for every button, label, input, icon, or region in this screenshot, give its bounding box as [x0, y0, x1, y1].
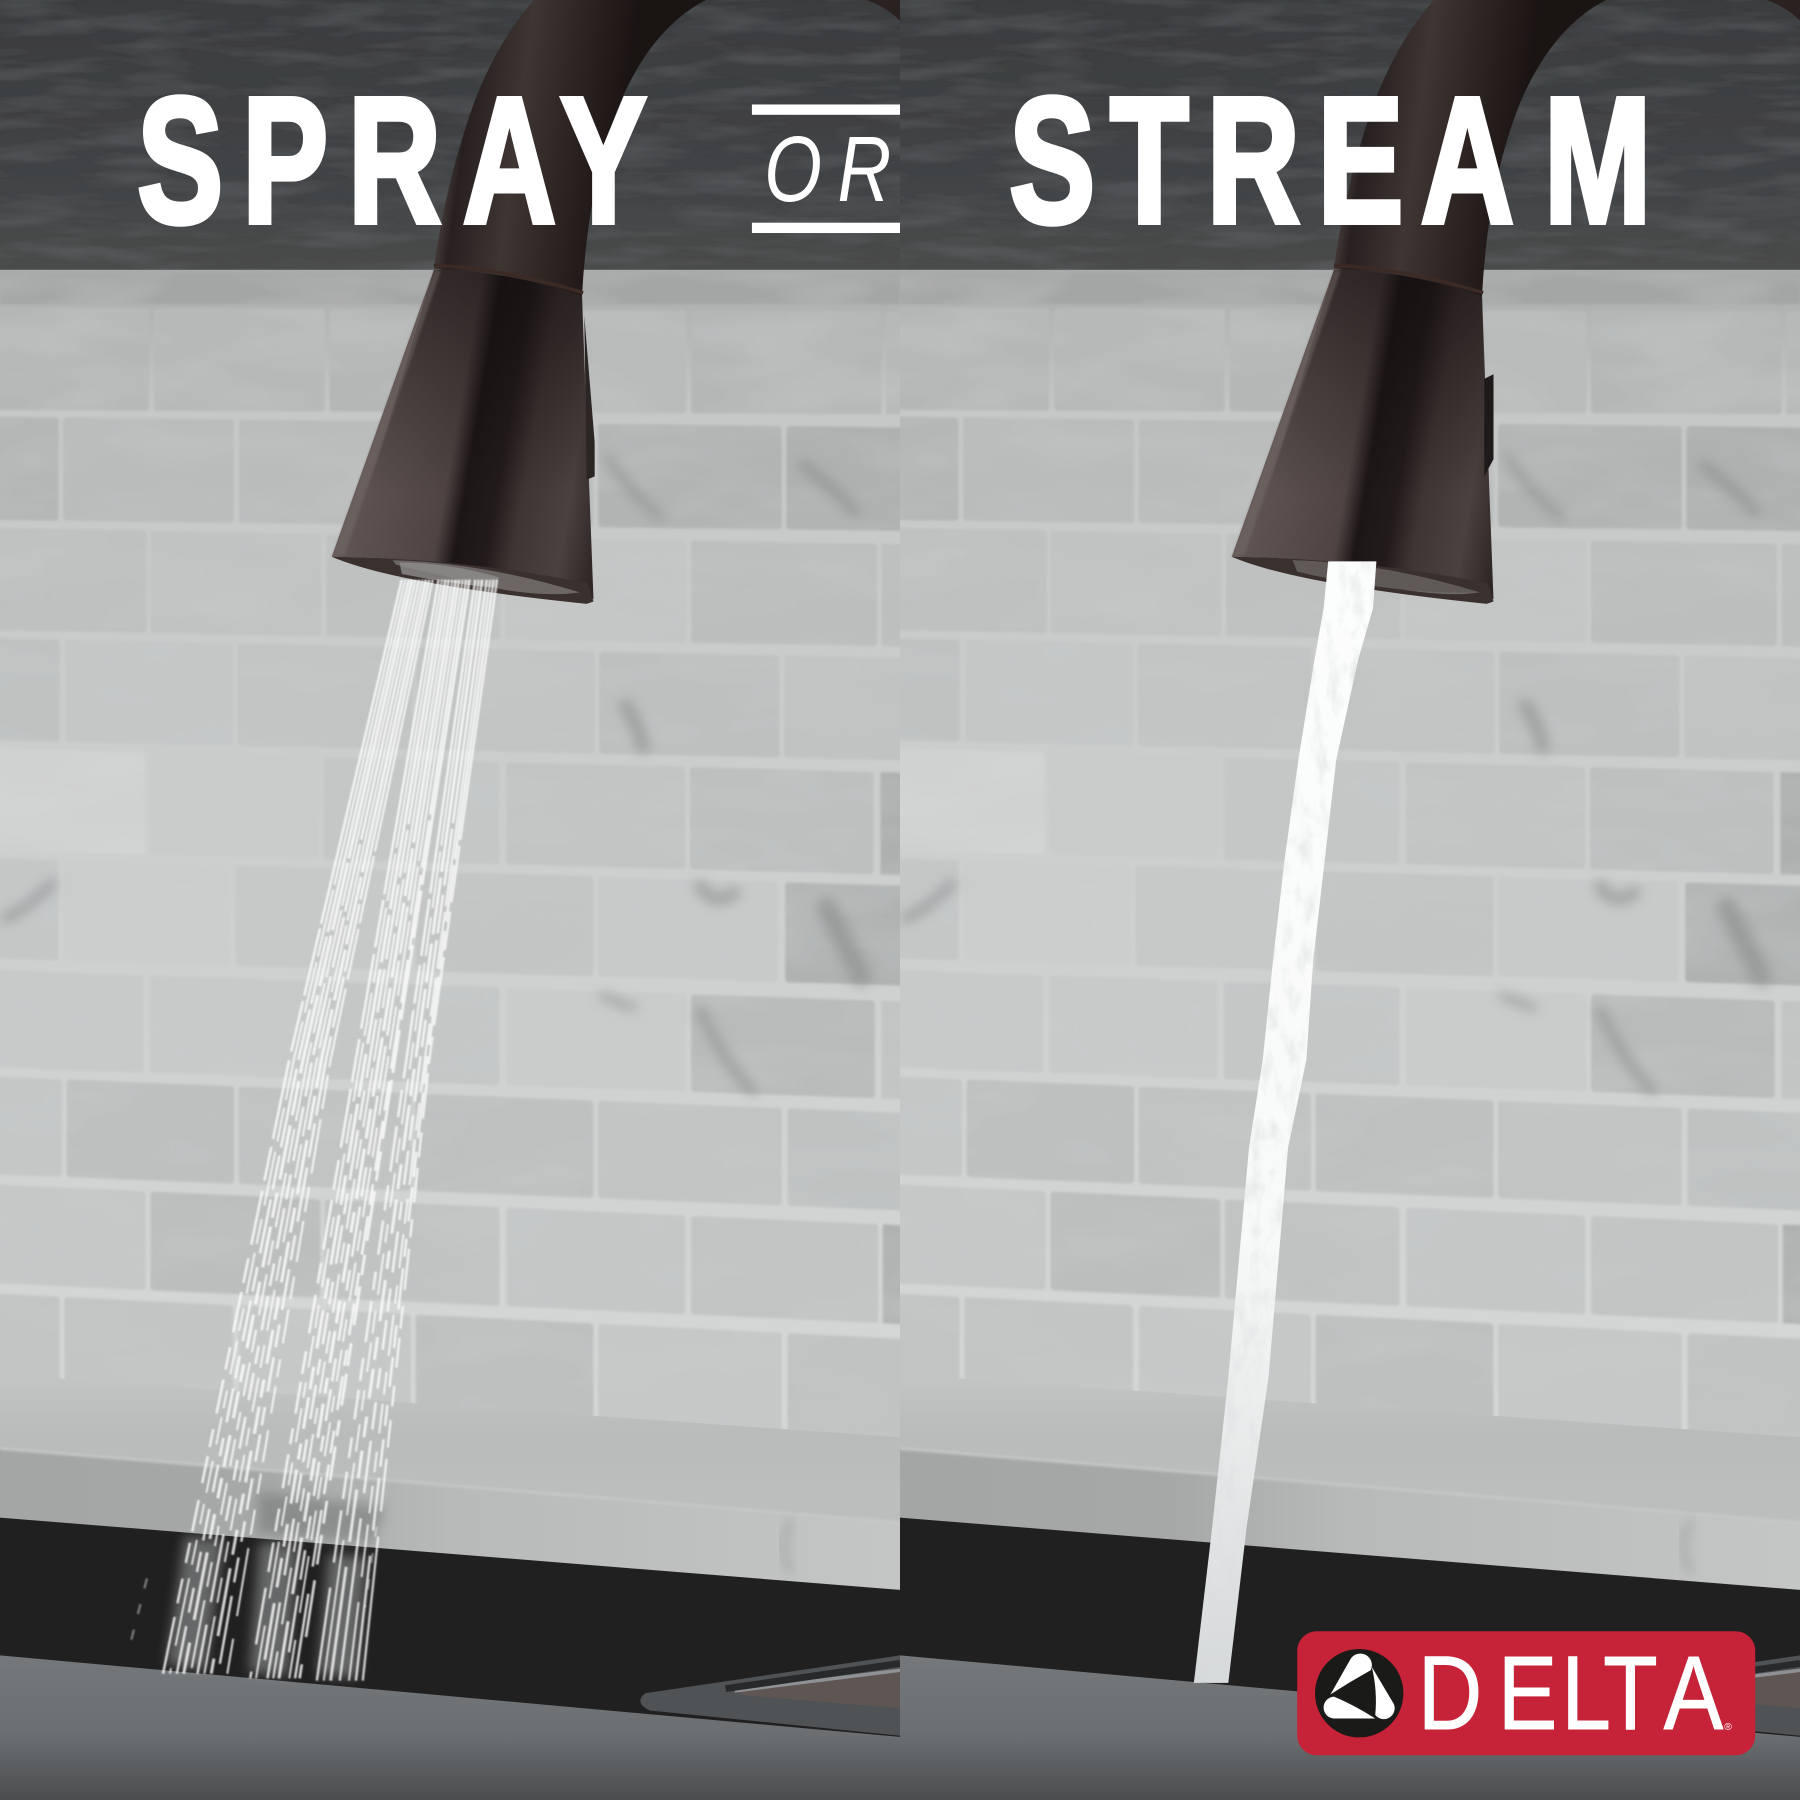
- stream aerator: [1293, 560, 1480, 593]
- dark speckled sink back: [0, 1518, 900, 1745]
- faucet spray head: [332, 265, 593, 604]
- faucet neck: [434, 0, 706, 296]
- stream trigger button: [1484, 374, 1493, 476]
- right spray band: [317, 580, 497, 1681]
- soft shadow through spray on ledge: [258, 1492, 385, 1544]
- or divider with rules: [752, 104, 900, 233]
- lower countertop: [0, 1655, 900, 1800]
- water spray: [131, 580, 497, 1681]
- marble veins: [6, 459, 861, 1091]
- panel: stream scene background: [895, 0, 1800, 1800]
- faucet: spray side: [332, 0, 900, 604]
- or divider with rules: OR: [764, 117, 891, 221]
- spray haze in dark basin: [186, 1538, 348, 1676]
- spray aerator nozzle highlight: [399, 562, 499, 588]
- stainless sink rim: [640, 1655, 900, 1736]
- red badge background: [1297, 1631, 1755, 1755]
- panel: spray scene background: [0, 0, 921, 1800]
- spray trigger button: [584, 316, 595, 480]
- registered mark: ®: [1724, 1722, 1732, 1733]
- dark upper wall band: [0, 0, 900, 270]
- middle spray band: [250, 580, 470, 1678]
- marble countertop ledge: [0, 1374, 900, 1591]
- delta triangle mark: [1315, 1649, 1403, 1737]
- top curve fragment: [867, 0, 900, 21]
- DELTA wordmark: DELTA: [1418, 1634, 1723, 1751]
- title: stream: STREAM: [1009, 61, 1651, 261]
- stray droplets: [131, 1527, 377, 1642]
- faucet: stream side: [1232, 0, 1800, 604]
- left spray band: [163, 580, 433, 1674]
- water stream: [1194, 561, 1376, 1683]
- title: spray: SPRAY: [137, 61, 646, 261]
- logo: Delta badge: [1297, 1631, 1755, 1755]
- marble subway tile wall: [0, 270, 921, 1452]
